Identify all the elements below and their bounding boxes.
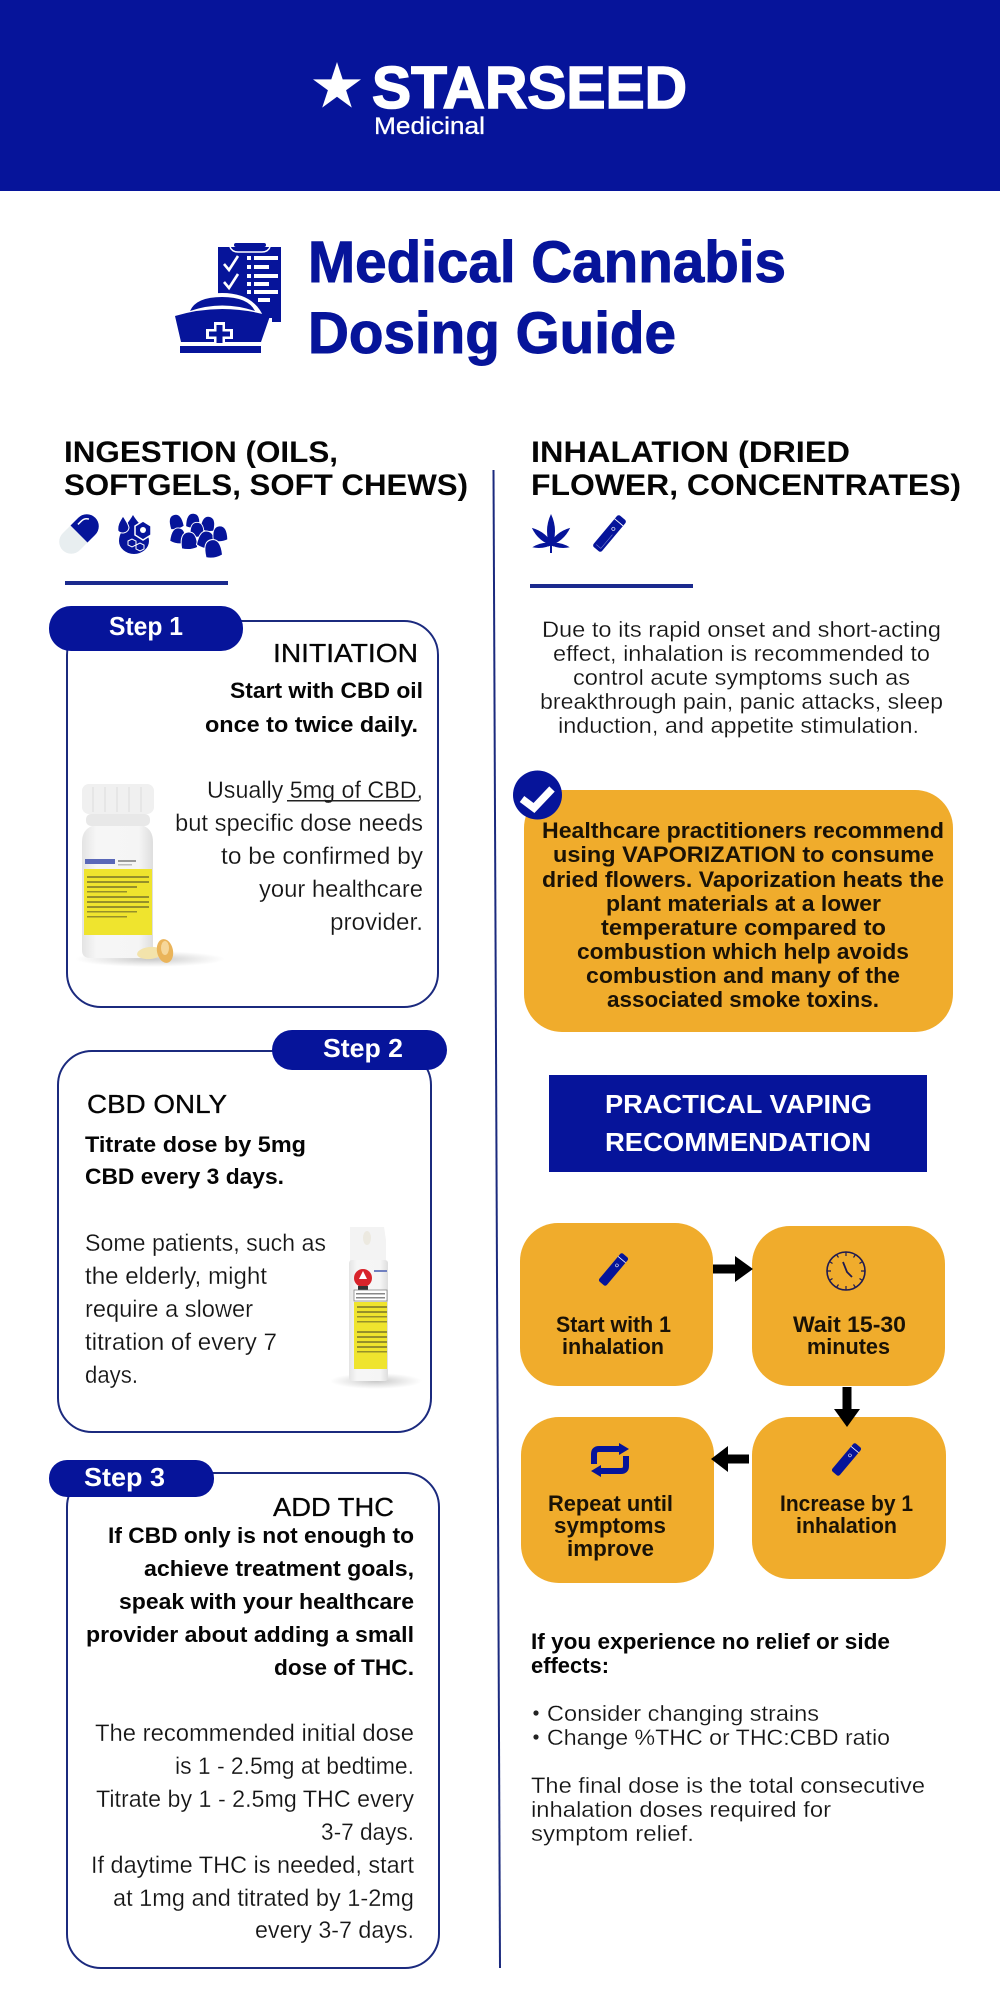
label: minutes bbox=[807, 1334, 890, 1359]
bold instruction: CBD every 3 days. bbox=[85, 1164, 284, 1189]
bold instruction bbox=[85, 1132, 306, 1189]
body text: If daytime THC is needed, start bbox=[91, 1852, 414, 1879]
icon: vape pen bbox=[598, 1252, 629, 1287]
label bbox=[556, 1312, 671, 1359]
badge: step 3 bbox=[49, 1460, 214, 1497]
body text: but specific dose needs bbox=[175, 810, 423, 837]
body text: every 3-7 days. bbox=[255, 1917, 414, 1944]
header banner bbox=[0, 0, 1000, 191]
callout text: temperature compared to bbox=[601, 915, 886, 940]
heading: ingestion: SOFTGELS, SOFT CHEWS) bbox=[64, 469, 468, 502]
text block: no relief or side effects: effects: bbox=[531, 1653, 609, 1678]
banner: practical vaping recommendation: RECOMMENDATION bbox=[605, 1127, 871, 1157]
logo subtitle: Medicinal bbox=[374, 113, 485, 140]
bold instruction bbox=[205, 678, 423, 737]
badge: step 1: Step 1 bbox=[109, 611, 183, 641]
body text: your healthcare bbox=[259, 876, 423, 903]
badge: step 3: Step 3 bbox=[84, 1462, 165, 1492]
icon: clipboard and nurse cap bbox=[175, 243, 281, 353]
panel: step 2 CBD only bbox=[58, 1030, 447, 1432]
body text bbox=[175, 777, 423, 936]
callout text: Healthcare practitioners recommend bbox=[542, 818, 944, 843]
intro paragraph bbox=[540, 617, 943, 738]
panel: step 1 initiation bbox=[49, 606, 438, 1007]
body text: days. bbox=[85, 1362, 138, 1389]
callout text bbox=[542, 818, 944, 1012]
intro paragraph: control acute symptoms such as bbox=[573, 665, 910, 690]
label bbox=[780, 1491, 913, 1538]
body text: at 1mg and titrated by 1-2mg bbox=[113, 1885, 414, 1912]
text block: no relief or side effects: Change %THC or THC:CBD ratio bbox=[547, 1725, 890, 1750]
icon: logo star bbox=[313, 62, 361, 108]
text block: no relief or side effects: If you experience no relief or side bbox=[531, 1629, 890, 1654]
body text: 3-7 days. bbox=[321, 1819, 414, 1846]
body text: the elderly, might bbox=[85, 1263, 267, 1290]
body text: titration of every 7 bbox=[85, 1329, 277, 1356]
heading: CBD only: CBD ONLY bbox=[87, 1089, 227, 1119]
arrow: down bbox=[834, 1387, 860, 1427]
icon: capsule bbox=[54, 509, 104, 559]
text block: no relief or side effects: symptom relief. bbox=[531, 1821, 694, 1846]
title text: Dosing Guide bbox=[308, 301, 676, 366]
bold instruction: speak with your healthcare bbox=[119, 1589, 414, 1614]
flow box: repeat until symptoms improve bbox=[521, 1417, 714, 1583]
label bbox=[793, 1312, 906, 1359]
text block: no relief or side effects: Consider changing strains bbox=[547, 1701, 819, 1726]
icon: vape pen bbox=[831, 1442, 862, 1477]
heading: add THC: ADD THC bbox=[273, 1492, 394, 1522]
icon: clock bbox=[827, 1252, 865, 1290]
title text bbox=[308, 230, 786, 366]
label: Repeat until bbox=[548, 1491, 673, 1516]
label: inhalation bbox=[796, 1513, 897, 1538]
banner: practical vaping recommendation: PRACTICAL VAPING bbox=[605, 1089, 872, 1119]
flow box: start with 1 inhalation bbox=[520, 1223, 713, 1386]
label: Start with 1 bbox=[556, 1312, 671, 1337]
callout text: using VAPORIZATION to consume bbox=[553, 842, 934, 867]
callout text: plant materials at a lower bbox=[606, 891, 881, 916]
body text: to be confirmed by bbox=[221, 843, 423, 870]
heading: initiation: INITIATION bbox=[273, 638, 418, 668]
callout text: dried flowers. Vaporization heats the bbox=[542, 867, 944, 892]
callout: vaporization recommendation bbox=[513, 770, 953, 1032]
heading: ingestion bbox=[64, 436, 468, 502]
heading: ingestion: INGESTION (OILS, bbox=[64, 436, 338, 469]
body text: provider. bbox=[330, 909, 423, 936]
body text: Some patients, such as bbox=[85, 1230, 326, 1257]
panel: step 3 add THC bbox=[49, 1460, 439, 1968]
bold instruction: dose of THC. bbox=[274, 1655, 414, 1680]
product: softgel bottle bbox=[75, 784, 225, 967]
flow box: wait 15-30 minutes bbox=[752, 1226, 945, 1386]
callout text: associated smoke toxins. bbox=[607, 987, 879, 1012]
body text: The recommended initial dose bbox=[95, 1720, 414, 1747]
product: spray bottle bbox=[330, 1227, 422, 1389]
bold instruction: provider about adding a small bbox=[86, 1622, 414, 1647]
bold instruction: once to twice daily. bbox=[205, 712, 418, 737]
label bbox=[548, 1491, 673, 1561]
label: symptoms bbox=[554, 1513, 666, 1538]
icon: check badge bbox=[513, 770, 562, 820]
arrow: left bbox=[711, 1446, 749, 1472]
badge: step 2 bbox=[272, 1030, 447, 1070]
icon: vape pen bbox=[592, 514, 627, 553]
title block bbox=[175, 230, 786, 366]
text block: no relief or side effects: The final dose is the total consecutive bbox=[531, 1773, 925, 1798]
body text: Usually 5mg of CBD, bbox=[207, 777, 423, 804]
intro paragraph: effect, inhalation is recommended to bbox=[553, 641, 930, 666]
body text bbox=[85, 1230, 326, 1389]
bold instruction bbox=[86, 1523, 414, 1680]
body text: is 1 - 2.5mg at bedtime. bbox=[175, 1753, 414, 1780]
bold instruction: Start with CBD oil bbox=[230, 678, 423, 703]
badge: step 2: Step 2 bbox=[323, 1033, 403, 1063]
badge: step 1 bbox=[49, 606, 243, 651]
bold instruction: achieve treatment goals, bbox=[144, 1556, 414, 1581]
label: inhalation bbox=[562, 1334, 664, 1359]
bold instruction: Titrate dose by 5mg bbox=[85, 1132, 306, 1157]
body text bbox=[91, 1720, 414, 1944]
callout text: combustion which help avoids bbox=[577, 939, 909, 964]
icon: cannabis leaf bbox=[530, 514, 572, 553]
label: Increase by 1 bbox=[780, 1491, 913, 1516]
banner: practical vaping recommendation bbox=[549, 1075, 927, 1172]
label: Wait 15-30 bbox=[793, 1312, 906, 1337]
flow box: increase by 1 inhalation bbox=[752, 1417, 946, 1579]
icon: repeat bbox=[591, 1443, 629, 1477]
bold instruction: If CBD only is not enough to bbox=[108, 1523, 414, 1548]
icon: soft chews bbox=[167, 513, 228, 559]
arrow: right bbox=[713, 1256, 753, 1282]
heading: inhalation: FLOWER, CONCENTRATES) bbox=[531, 469, 961, 502]
intro paragraph: breakthrough pain, panic attacks, sleep bbox=[540, 689, 943, 714]
label: improve bbox=[567, 1536, 654, 1561]
text block: no relief or side effects: inhalation doses required for bbox=[531, 1797, 831, 1822]
icon: oil drops bbox=[118, 515, 151, 554]
heading: inhalation bbox=[531, 436, 961, 502]
heading: inhalation: INHALATION (DRIED bbox=[531, 436, 850, 469]
intro paragraph: Due to its rapid onset and short-acting bbox=[542, 617, 941, 642]
callout text: combustion and many of the bbox=[586, 963, 900, 988]
title text: Medical Cannabis bbox=[308, 230, 786, 295]
logo wordmark: STARSEED bbox=[372, 55, 687, 121]
intro paragraph: induction, and appetite stimulation. bbox=[558, 713, 919, 738]
body text: require a slower bbox=[85, 1296, 253, 1323]
body text: Titrate by 1 - 2.5mg THC every bbox=[96, 1786, 414, 1813]
text block: no relief or side effects bbox=[531, 1629, 925, 1846]
